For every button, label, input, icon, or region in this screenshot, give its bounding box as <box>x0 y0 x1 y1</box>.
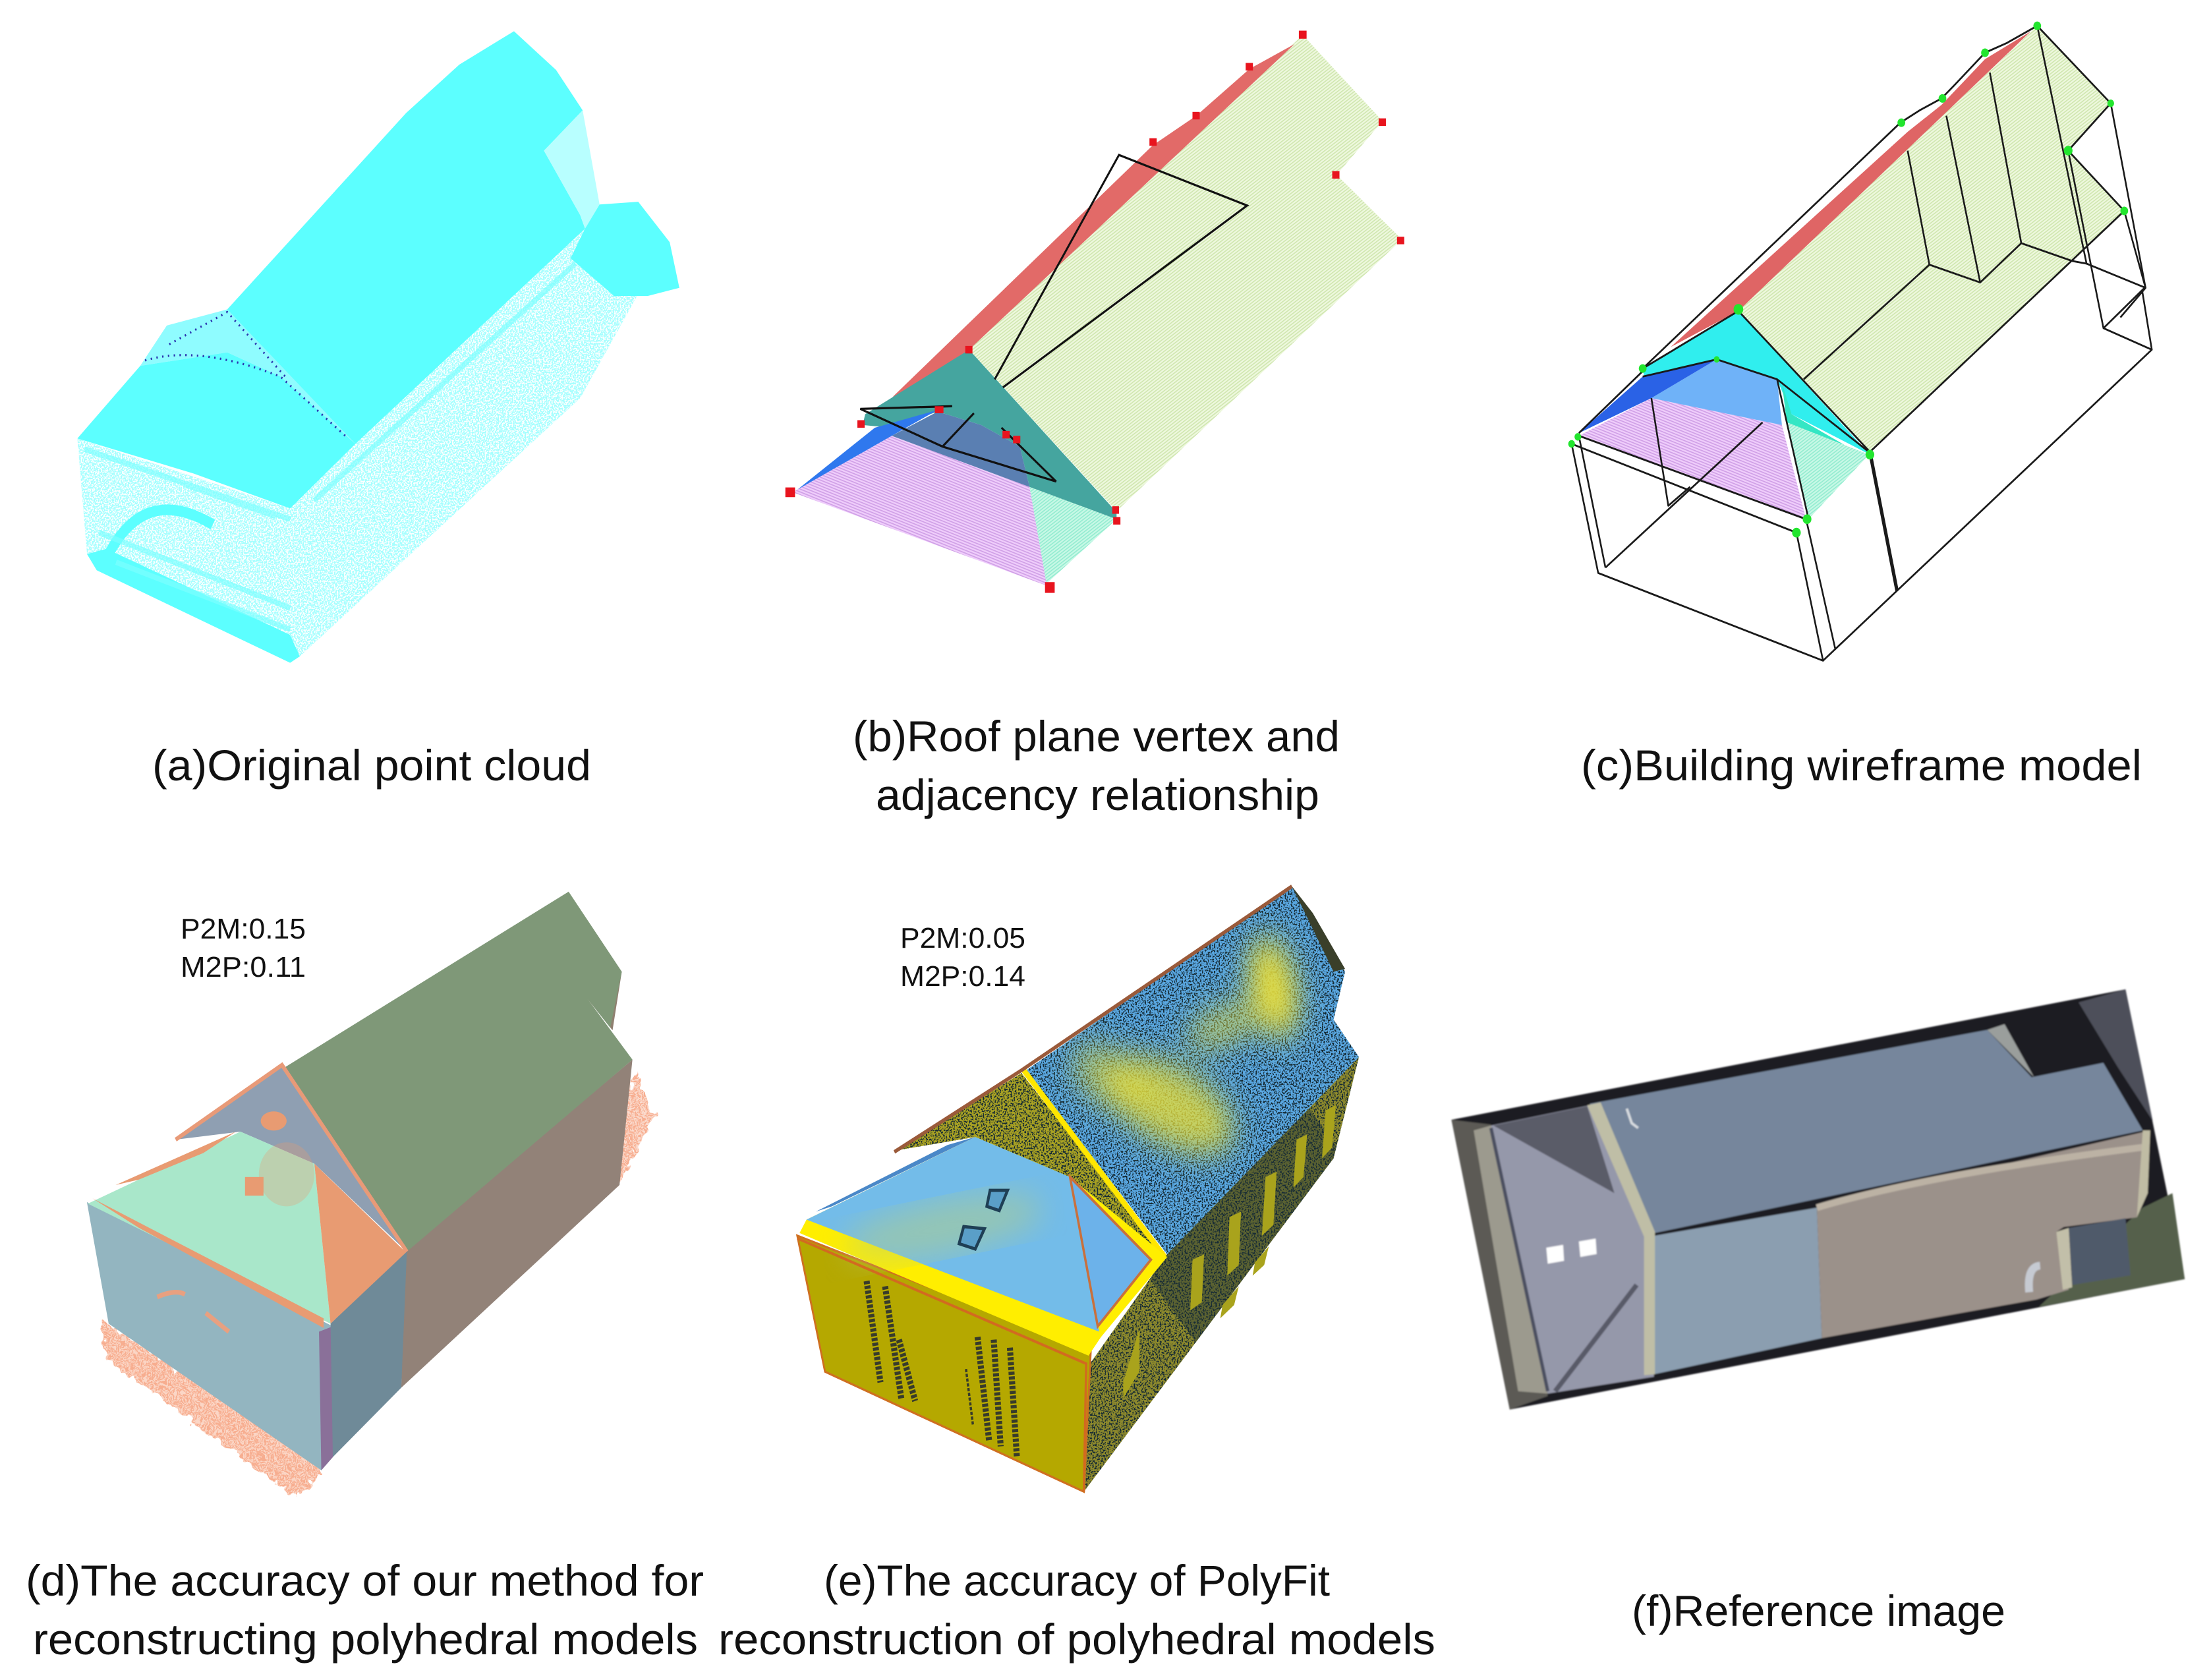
slate overlap plane <box>892 411 1029 487</box>
green roof plane <box>1738 26 2124 452</box>
cyan roof plane <box>1643 311 1870 455</box>
hip roof dark left plane <box>816 1137 975 1211</box>
hip eave underlay <box>799 1137 1167 1356</box>
gable edge stroke <box>176 1065 407 1252</box>
rear wing roof edge <box>1292 886 1345 971</box>
middle gable points <box>140 309 355 444</box>
caption b second line: adjacency relationship <box>876 770 1319 819</box>
main roof <box>1026 886 1359 1254</box>
hip roof blue <box>807 1137 1099 1332</box>
lower right roof <box>1817 1130 2150 1338</box>
right ground strip <box>2039 1193 2185 1307</box>
skylight lower <box>959 1227 985 1249</box>
noise points on ridge <box>145 312 348 438</box>
adjacency lines <box>860 155 1247 482</box>
dark courtyard and neighbours <box>2079 989 2152 1120</box>
roof light seam <box>1817 1147 2142 1207</box>
annex ledge <box>2056 1228 2072 1290</box>
side wall speckle <box>1085 1058 1359 1489</box>
teal roof plane <box>863 350 1116 519</box>
caption d second line: reconstructing polyhedral models <box>33 1615 698 1664</box>
pale mint roof plane <box>1787 422 1869 519</box>
gable yellow ridge <box>1024 1070 1164 1257</box>
metric e M2P: M2P:0.14 <box>900 960 1025 993</box>
wall streaks <box>84 264 575 629</box>
light blue roof plane <box>1651 359 1782 425</box>
rear scatter points <box>617 1072 658 1188</box>
mint roof plane <box>1029 487 1116 584</box>
image base <box>1451 989 2185 1410</box>
roof mark <box>1626 1109 1638 1128</box>
long side wall <box>401 1060 633 1387</box>
rear wing wall <box>585 971 622 1030</box>
caption d: (d)The accuracy of our method for <box>26 1556 704 1605</box>
skylight second <box>1579 1238 1597 1257</box>
purple corner strip <box>319 1326 333 1470</box>
right front wall <box>331 1252 407 1457</box>
green vertices <box>1568 22 2128 537</box>
side wall windows <box>1123 1105 1336 1399</box>
left cornice <box>1474 1126 1548 1393</box>
parapet strip <box>1588 1103 1655 1376</box>
chimney pipe <box>2029 1265 2040 1292</box>
main roof speckle and yellow patches <box>1021 881 1364 1260</box>
purple roof plane <box>793 436 1049 587</box>
hip right plane <box>1070 1177 1151 1326</box>
mint roof plane <box>1782 383 1847 447</box>
side wall <box>1084 1057 1359 1492</box>
red roof plane <box>1671 31 2031 347</box>
caption b: (b)Roof plane vertex and <box>853 712 1340 761</box>
front wall <box>87 1202 333 1470</box>
caption e second line: reconstruction of polyhedral models <box>718 1615 1435 1664</box>
caption f: (f)Reference image <box>1632 1586 2005 1635</box>
green roof plane <box>969 35 1402 511</box>
rear gable points <box>571 202 679 296</box>
blue roof plane <box>797 410 938 490</box>
diagonal hip line <box>1555 1285 1636 1391</box>
ground scatter points <box>100 1319 322 1497</box>
left ground strip <box>1451 1120 1548 1410</box>
caption a: (a)Original point cloud <box>152 741 591 790</box>
dark triangle roof <box>1493 1106 1615 1193</box>
left eave dark line <box>1491 1128 1548 1391</box>
rear wing wall points <box>544 110 600 229</box>
panel: reference aerial image <box>1451 989 2185 1410</box>
front wall <box>797 1236 1091 1492</box>
gable olive plane <box>897 1073 1164 1257</box>
panel: roof plane vertices <box>786 31 1404 593</box>
caption c: (c)Building wireframe model <box>1581 741 2142 790</box>
arch points <box>109 509 213 554</box>
upper roof <box>1590 1030 2142 1234</box>
metric e P2M: P2M:0.05 <box>900 922 1025 954</box>
hip roof points <box>77 353 355 508</box>
wireframe lines <box>1572 26 2152 660</box>
panel: PolyFit accuracy <box>797 881 1396 1494</box>
main green roof <box>284 892 633 1252</box>
front wall dark columns <box>867 1281 1017 1457</box>
metric d M2P: M2P:0.11 <box>181 951 306 983</box>
skylight squares <box>1546 1245 1564 1263</box>
caption e: (e)The accuracy of PolyFit <box>824 1556 1330 1605</box>
right end wall <box>2137 1130 2150 1217</box>
panel: original point cloud <box>72 31 679 667</box>
lower left roof <box>1649 1207 1822 1374</box>
hip roof light green <box>88 1132 331 1323</box>
red roof plane <box>889 44 1294 401</box>
front wall orange marks <box>158 1292 229 1332</box>
dark blue roof plane <box>1579 359 1717 433</box>
front wall points <box>87 549 300 663</box>
orange patches <box>92 1111 324 1328</box>
gable speckle <box>901 1073 1152 1244</box>
main roof points <box>227 31 585 444</box>
panel: wireframe model <box>1568 22 2152 660</box>
upper roof ledge <box>1987 1024 2034 1077</box>
orange wall edge <box>797 1238 1086 1492</box>
hip orange plane <box>314 1164 407 1323</box>
gable blue-grey plane <box>176 1065 407 1252</box>
hip roof yellow-green tint <box>839 1181 1047 1274</box>
panel: our method accuracy <box>87 892 661 1505</box>
building walls point cloud <box>72 226 652 667</box>
left grey roof <box>1491 1105 1654 1393</box>
metric d P2M: P2M:0.15 <box>181 913 306 945</box>
skylights <box>987 1190 1008 1211</box>
small annex <box>2069 1218 2131 1285</box>
purple roof plane <box>1579 398 1806 519</box>
ridge orange edge <box>894 886 1292 1152</box>
red vertices <box>786 31 1404 593</box>
